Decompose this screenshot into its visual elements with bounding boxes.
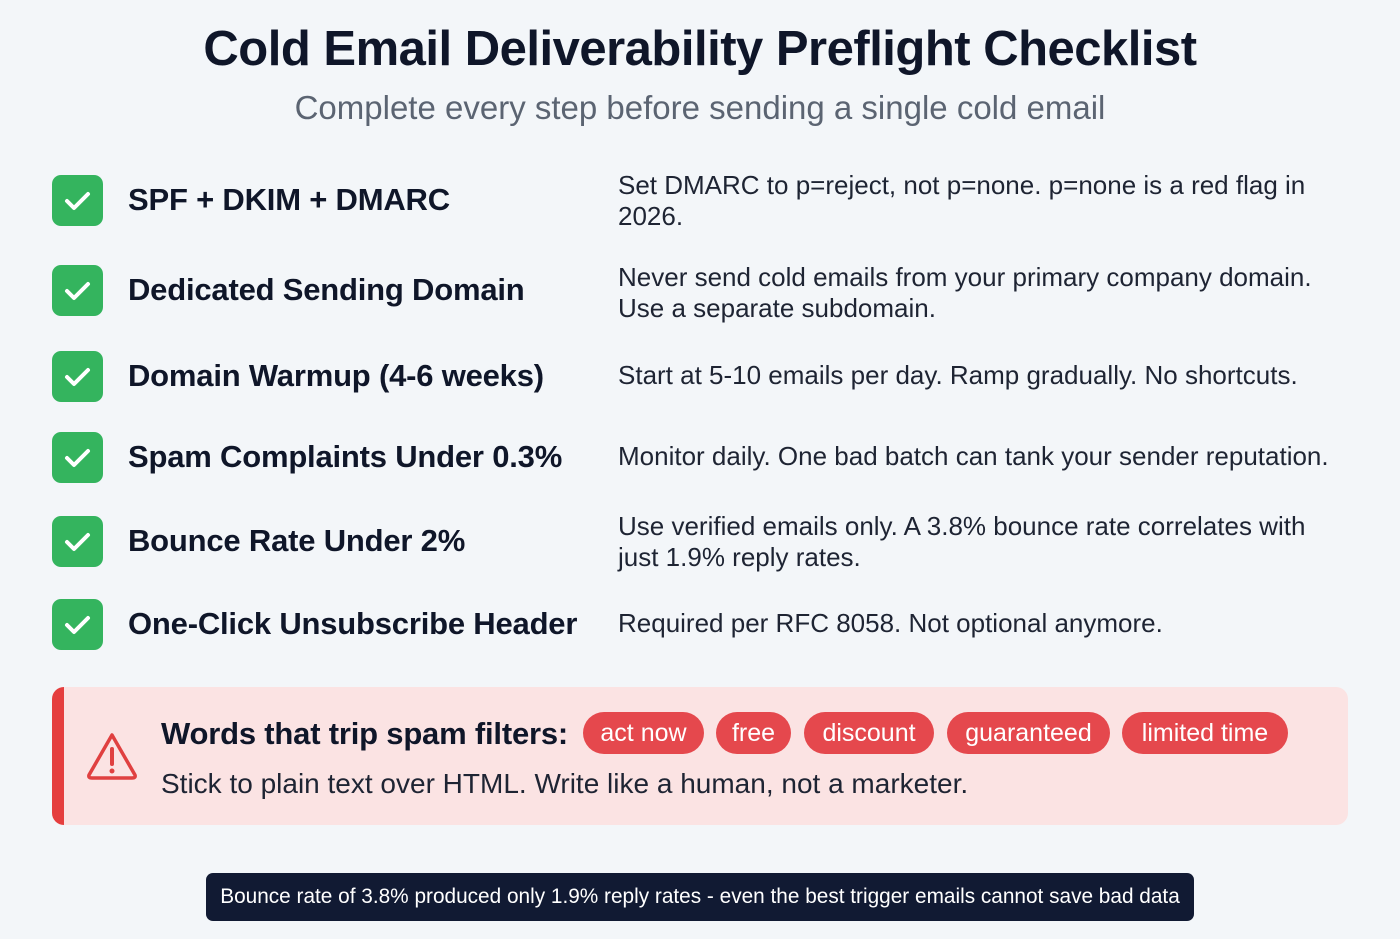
icon: check <box>52 599 103 650</box>
panel: spam words alert <box>52 687 1348 825</box>
item description: Set DMARC to p=reject, not p=none. p=none is a red flag in 2026. <box>618 170 1305 231</box>
icon: check <box>52 432 103 483</box>
item title: SPF + DKIM + DMARC <box>128 182 450 217</box>
checklist item 3 <box>52 351 1298 402</box>
pill: discount <box>804 712 934 754</box>
item description: Required per RFC 8058. Not optional anymore. <box>618 608 1163 638</box>
pill: limited time: limited time <box>1142 719 1268 747</box>
item title: Dedicated Sending Domain <box>128 272 525 307</box>
footer callout: Bounce rate of 3.8% produced only 1.9% reply rates - even the best trigger emails cannot save bad data <box>220 885 1180 908</box>
icon: warning triangle <box>87 733 137 780</box>
icon: check <box>52 351 103 402</box>
checklist item 5 <box>52 511 1305 572</box>
icon: check <box>52 516 103 567</box>
item title: Spam Complaints Under 0.3% <box>128 439 562 474</box>
item title: One-Click Unsubscribe Header <box>128 606 577 641</box>
checklist item 1 <box>52 170 1305 231</box>
item description <box>617 511 1305 572</box>
alert heading: Words that trip spam filters: <box>161 716 568 751</box>
pill: guaranteed <box>947 712 1110 754</box>
item description: just 1.9% reply rates. <box>618 542 861 572</box>
icon: check <box>52 265 103 316</box>
checklist item 6 <box>52 599 1163 650</box>
pill: discount: discount <box>822 719 916 747</box>
item description: Start at 5-10 emails per day. Ramp gradually. No shortcuts. <box>618 360 1298 390</box>
pill: limited time <box>1122 712 1288 754</box>
title: Cold Email Deliverability Preflight Checklist <box>203 22 1197 76</box>
item description <box>618 262 1312 323</box>
icon: check <box>52 175 103 226</box>
item description: Monitor daily. One bad batch can tank your sender reputation. <box>618 441 1329 471</box>
alert body text: Stick to plain text over HTML. Write like a human, not a marketer. <box>161 768 968 799</box>
pill: guaranteed: guaranteed <box>965 719 1092 747</box>
pill: free: free <box>732 719 775 747</box>
pill: free <box>716 712 791 754</box>
footer callout <box>206 873 1194 921</box>
subtitle: Complete every step before sending a single cold email <box>295 89 1105 126</box>
pill: act now <box>583 712 704 754</box>
item description: Never send cold emails from your primary company domain. <box>618 262 1312 292</box>
checklist item 2 <box>52 262 1312 323</box>
checklist item 4 <box>52 432 1329 483</box>
pill: act now: act now <box>600 719 687 747</box>
item description: Use verified emails only. A 3.8% bounce rate correlates with <box>618 511 1305 541</box>
item title: Bounce Rate Under 2% <box>128 523 465 558</box>
item description: Use a separate subdomain. <box>618 293 936 323</box>
item title: Domain Warmup (4-6 weeks) <box>128 358 544 393</box>
